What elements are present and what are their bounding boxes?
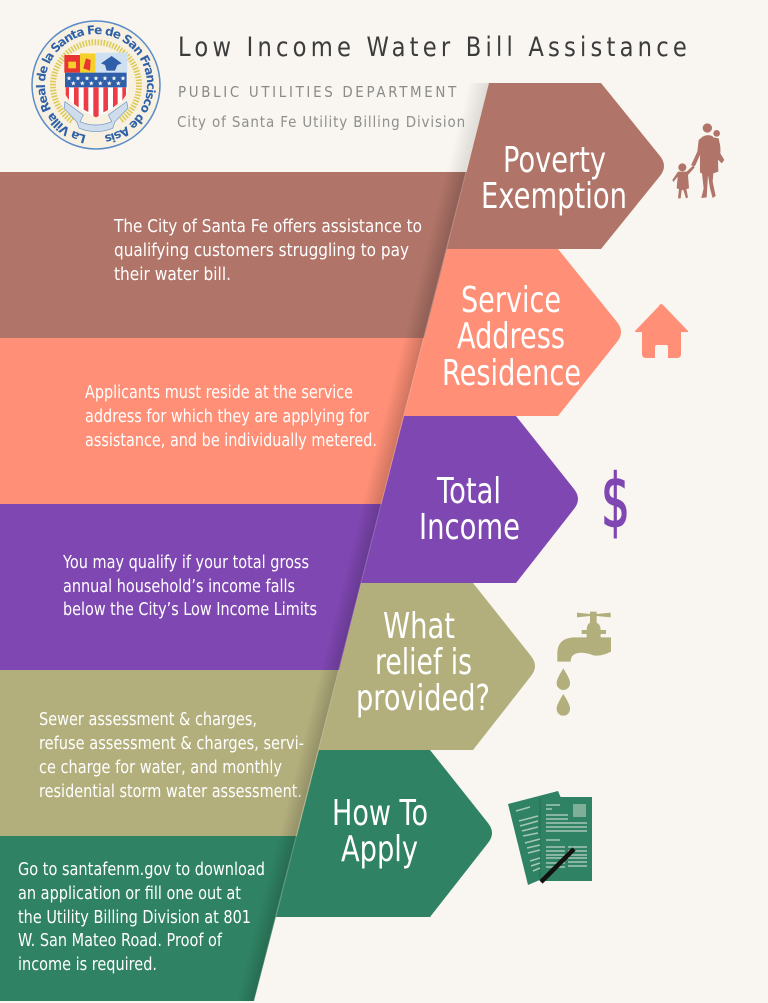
heading: service address residence <box>442 280 581 394</box>
arrow: total income <box>361 416 578 583</box>
body text: how to apply: the Utility Billing Division at 801 <box>18 908 251 928</box>
heading: how to apply: How To <box>332 793 428 834</box>
icon: city seal: La Villa Real de la Santa Fe de San Francisco de Asis <box>36 25 156 144</box>
heading: what relief is provided: relief is <box>375 642 472 683</box>
body text: poverty exemption: The City of Santa Fe offers assistance to <box>113 217 422 237</box>
department subtitle: PUBLIC UTILITIES DEPARTMENT <box>178 83 459 101</box>
body text: relief: ce charge for water, and monthly <box>39 758 282 778</box>
arrow: how to apply <box>276 750 492 917</box>
body text: total income: annual household’s income falls <box>63 577 295 597</box>
body text: relief: refuse assessment & charges, servi- <box>39 734 304 754</box>
heading: what relief is provided: provided? <box>356 678 490 719</box>
heading: poverty exemption <box>481 140 627 217</box>
panel: relief band <box>0 670 340 836</box>
heading: total income: Total <box>436 471 501 512</box>
icon: application documents <box>508 791 592 885</box>
body text: how to apply <box>18 860 265 975</box>
icon: faucet with drops <box>557 612 611 716</box>
body text: how to apply: income is required. <box>18 955 157 975</box>
body text: relief: residential storm water assessment. <box>39 782 302 802</box>
body text: how to apply: an application or fill one out at <box>18 884 241 904</box>
body text: service address: Applicants must reside at the service <box>85 383 353 403</box>
heading: poverty exemption: Poverty <box>503 140 606 181</box>
body text: poverty exemption: their water bill. <box>114 265 231 285</box>
panel: poverty exemption band <box>0 172 467 338</box>
arrow: service address residence <box>404 249 621 416</box>
body text: poverty exemption <box>113 217 422 285</box>
heading: poverty exemption: Exemption <box>481 176 627 217</box>
body text: service address: assistance, and be individually metered. <box>85 431 377 451</box>
icon: dollar sign: $ <box>601 459 630 545</box>
heading: total income <box>419 471 520 548</box>
body text: how to apply: W. San Mateo Road. Proof of <box>18 931 223 951</box>
panel: how to apply band <box>0 836 297 1001</box>
heading: total income: Income <box>419 507 520 548</box>
panel: service address band <box>0 338 425 504</box>
body text: relief: Sewer assessment & charges, <box>39 710 257 730</box>
body text: relief <box>39 710 304 802</box>
heading: what relief is provided <box>356 606 490 719</box>
arrow: poverty exemption <box>447 83 664 249</box>
icon: house <box>635 304 688 358</box>
body text: service address: address for which they are applying for <box>85 407 370 427</box>
heading: how to apply: Apply <box>341 829 418 870</box>
heading: service address residence: Residence <box>442 353 581 394</box>
body text: total income: below the City’s Low Income Limits <box>63 600 317 620</box>
heading: service address residence: Address <box>457 316 565 357</box>
body text: how to apply: Go to santafenm.gov to download <box>18 860 265 880</box>
heading: how to apply <box>332 793 428 870</box>
heading: what relief is provided: What <box>383 606 455 647</box>
arrow: what relief is provided <box>319 583 535 750</box>
icon: family <box>672 123 724 198</box>
body text: total income: You may qualify if your total gross <box>62 553 309 573</box>
division subtitle: City of Santa Fe Utility Billing Division <box>177 113 466 131</box>
body text: poverty exemption: qualifying customers struggling to pay <box>114 241 409 261</box>
body text: service address <box>85 383 377 451</box>
heading: service address residence: Service <box>461 280 561 321</box>
body text: total income <box>62 553 317 620</box>
panel: total income band <box>0 504 383 670</box>
